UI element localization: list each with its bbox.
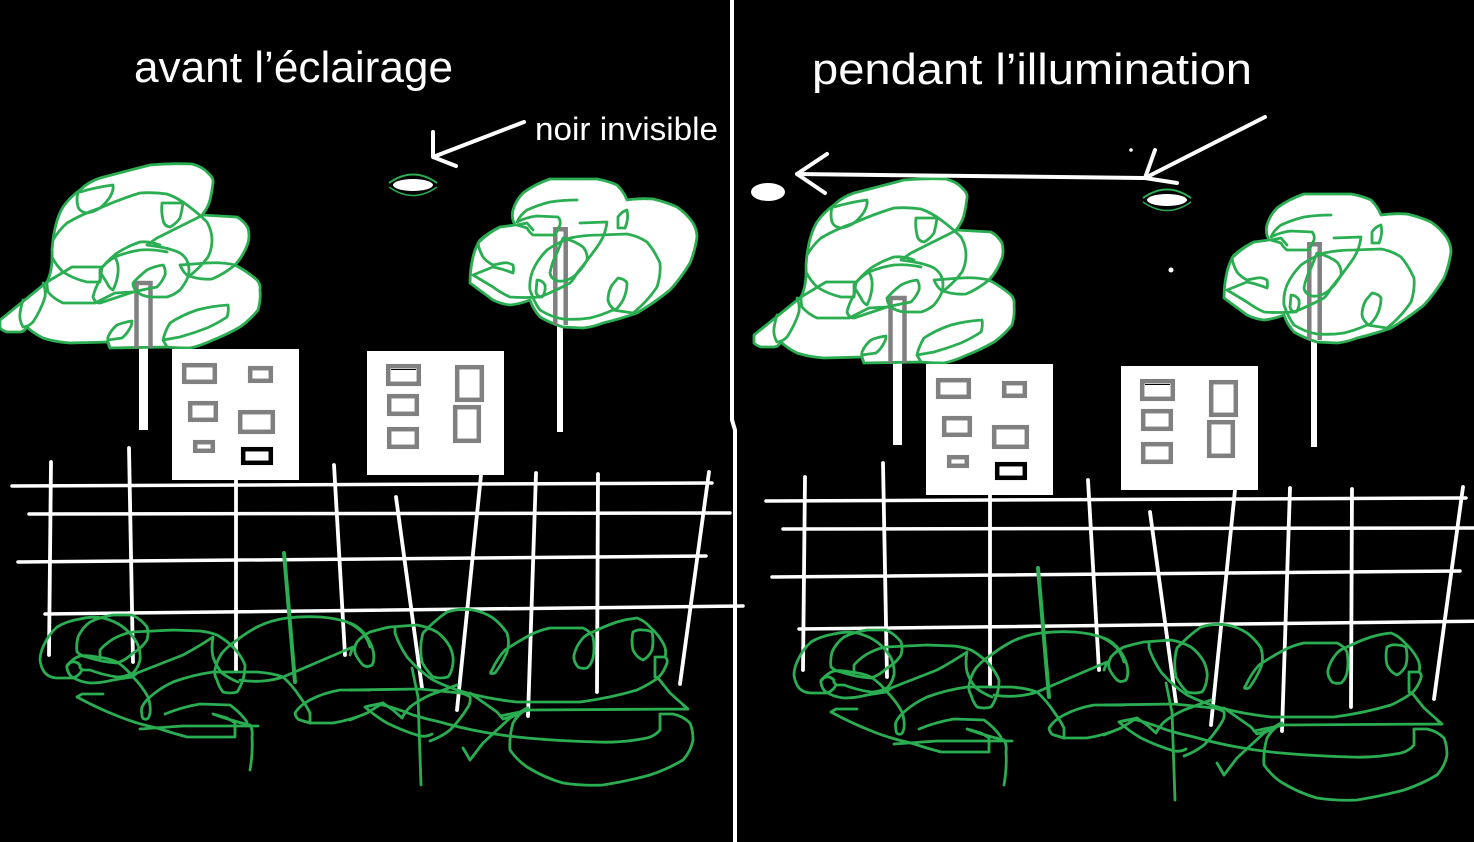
label: noir invisible: noir invisible [535,111,718,147]
speck near lamp [1129,148,1133,152]
arrow: long arrow to the left, light travelling [797,154,1143,193]
panel: scene before lighting [0,164,743,785]
heading: pendant l'illumination: pendant l’illumination [812,45,1252,94]
building: left building with windows [172,349,299,480]
speck below lamp [1168,268,1174,272]
post: green stroke in the fence [284,553,295,682]
hedge: green scribbled bushes [40,609,693,785]
divider between the two panels [732,0,735,842]
arrow pointing to the lamp during illumination [1145,117,1265,183]
panel: scene during illumination [754,179,1474,800]
arrow pointing to the invisible black object [433,122,524,166]
object: white ellipse at arrow tip [751,183,785,201]
fence: white grid of hand-drawn lines [12,448,743,716]
tree: large left tree [0,164,260,430]
building: right building with windows [367,351,504,475]
tree: right tree [470,179,697,432]
heading: avant l'éclairage: avant l’éclairage [134,43,453,92]
object: lamp, white ellipse ringed in green [389,174,437,196]
